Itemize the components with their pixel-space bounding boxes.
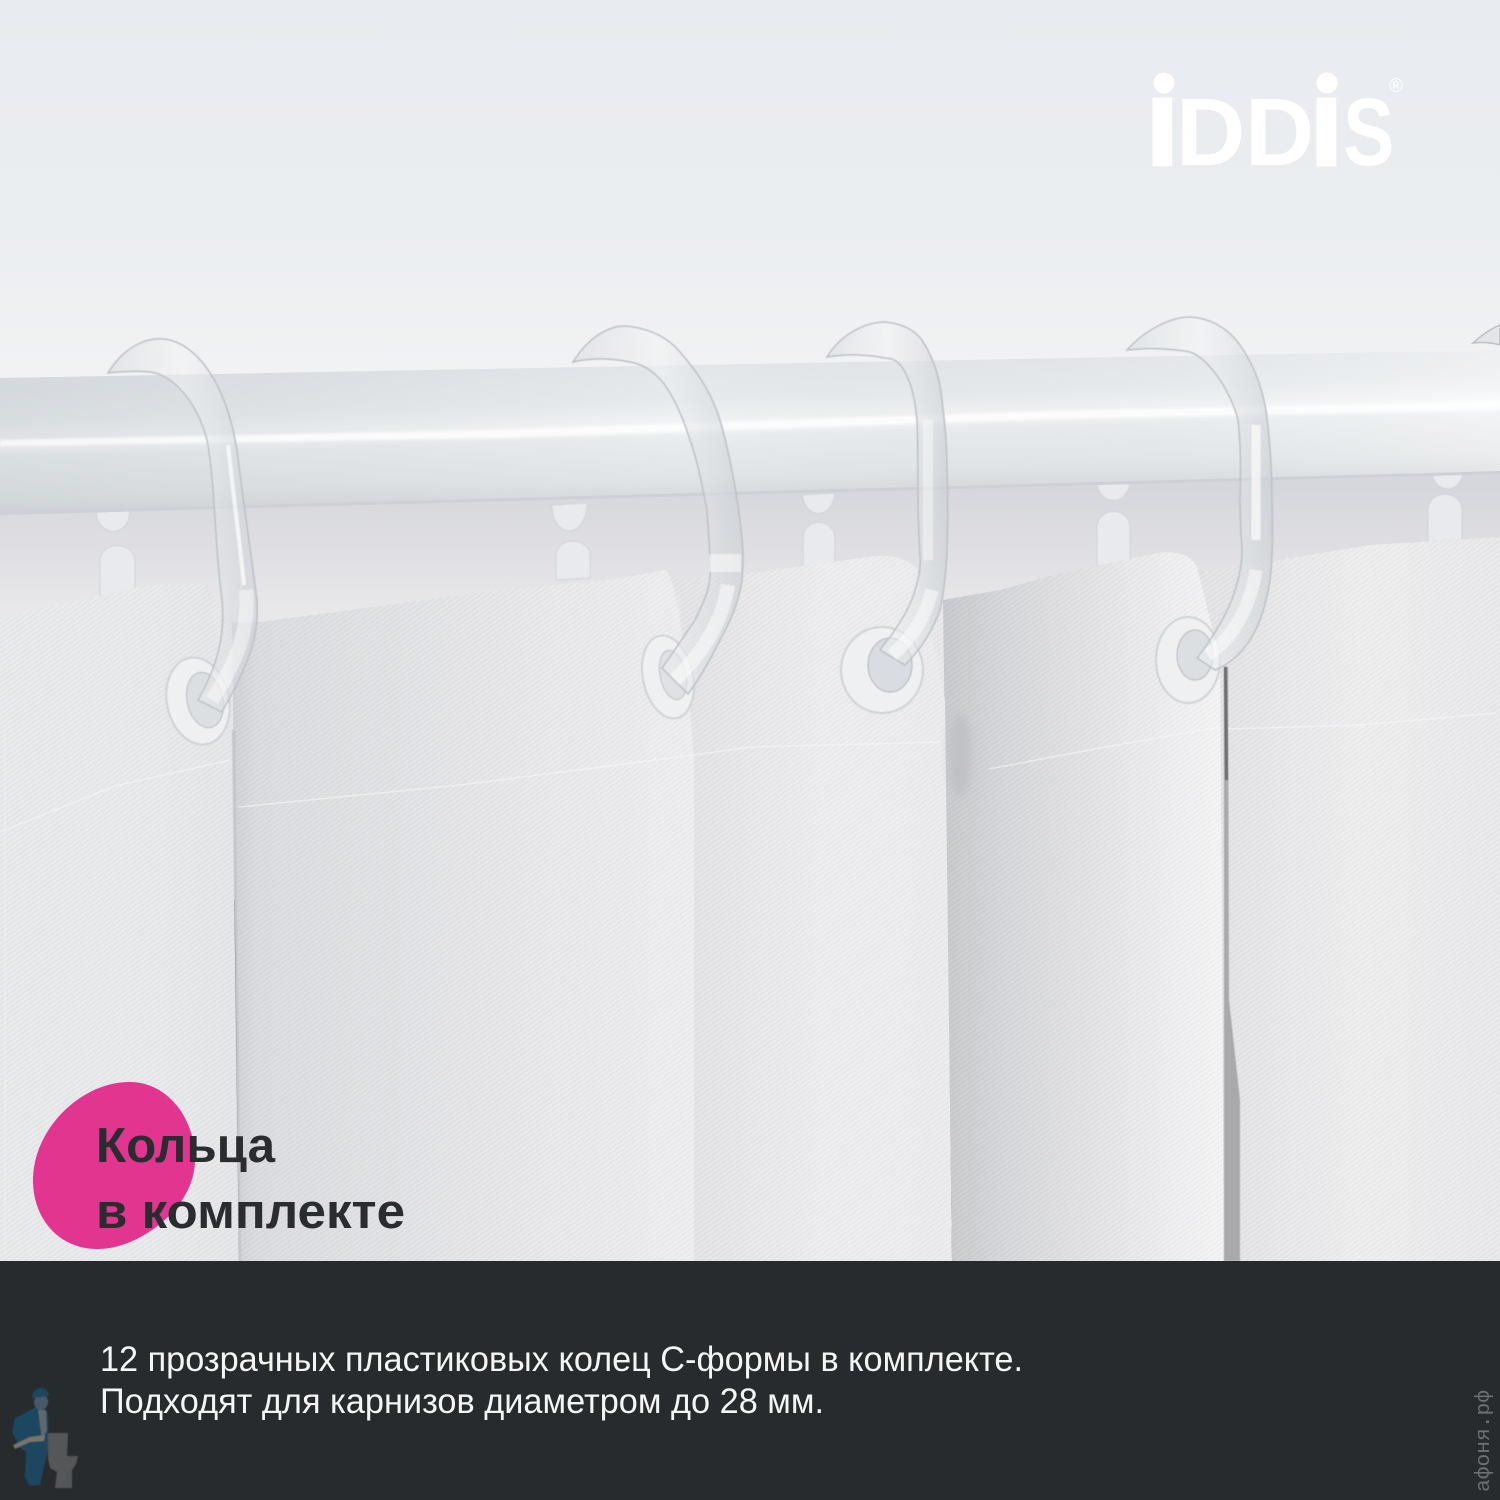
curtain fold shadows and seams xyxy=(0,666,1496,1261)
curtain panel 2 xyxy=(232,570,694,1261)
logo: iddis: i xyxy=(1145,53,1180,192)
curtain panel 5 xyxy=(1205,537,1500,1261)
logo: iddis: D xyxy=(1245,79,1314,186)
footer bar xyxy=(0,1261,1500,1500)
description text: Подходят для карнизов диаметром до 28 мм. xyxy=(100,1382,824,1421)
background wall xyxy=(0,0,1500,520)
site watermark: афоня.рф xyxy=(1473,1390,1496,1492)
logo: iddis xyxy=(1152,72,1403,166)
curtain panel 3 xyxy=(680,556,952,1261)
curtain ring and eyelet 3 xyxy=(827,322,948,713)
logo: iddis: ® xyxy=(1389,76,1403,97)
curtain ring 5 partial xyxy=(1473,325,1500,345)
curtain rod xyxy=(0,350,1500,515)
pink accent blob xyxy=(33,1082,195,1249)
curtain ring and eyelet 1 xyxy=(108,339,257,750)
heading: Кольца xyxy=(96,1119,276,1173)
curtain panel 4 xyxy=(943,552,1224,1261)
curtain panel 1 xyxy=(0,583,239,1261)
curtain ring and eyelet 2 xyxy=(573,326,743,723)
logo: iddis: S xyxy=(1343,79,1394,186)
logo: iddis: i xyxy=(1309,53,1344,192)
description text: 12 прозрачных пластиковых колец С-формы в комплекте. xyxy=(100,1340,1023,1379)
logo: iddis: D xyxy=(1176,79,1245,186)
heading xyxy=(96,1119,405,1239)
heading: в комплекте xyxy=(96,1185,405,1239)
band of shadow below the rod xyxy=(0,465,1500,900)
hanger beads behind the rod xyxy=(96,473,1463,597)
curtain ring and eyelet 4 xyxy=(1127,317,1273,703)
description text xyxy=(100,1340,1023,1421)
icon: plumber with toilet watermark xyxy=(12,1388,78,1488)
